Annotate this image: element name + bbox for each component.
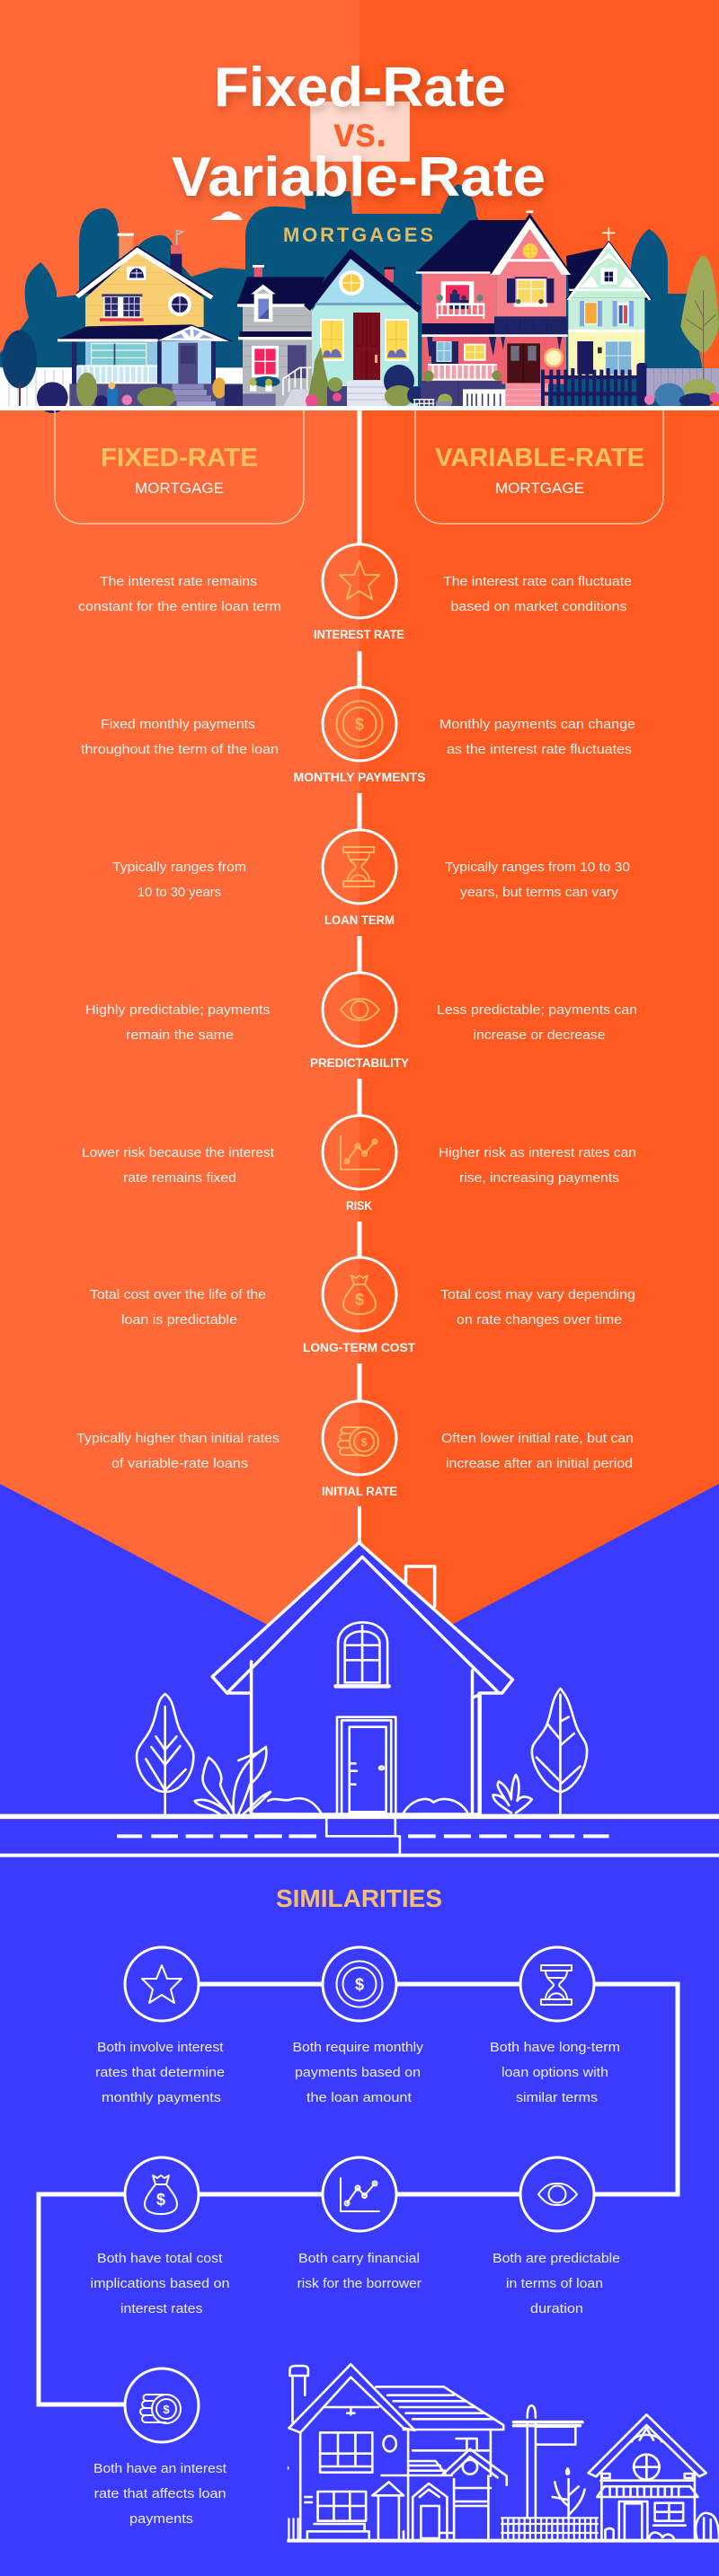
street lines bbox=[0, 1814, 719, 1819]
label: LOAN TERM bbox=[324, 913, 395, 927]
fixed-rate text: Highly predictable; payments bbox=[85, 1002, 270, 1018]
gray house bbox=[236, 265, 325, 406]
variable-rate text: Typically ranges from 10 to 30 bbox=[445, 860, 630, 875]
connector path through similarities bbox=[39, 1984, 678, 2404]
pink house bbox=[413, 210, 652, 409]
text bbox=[297, 2251, 422, 2291]
connector bbox=[358, 651, 361, 688]
front gables bbox=[381, 2439, 507, 2539]
yellow house bbox=[0, 231, 243, 413]
icon: coins: $ bbox=[360, 1435, 368, 1449]
illustration: line-art house on street bbox=[0, 1542, 719, 1856]
variable-rate text: based on market conditions bbox=[451, 599, 627, 614]
variable-rate text: The interest rate can fluctuate bbox=[443, 574, 632, 589]
vs. text: vs. bbox=[333, 109, 386, 155]
cloud bbox=[211, 212, 243, 220]
text: rates that determine bbox=[95, 2065, 225, 2080]
ground line bbox=[287, 2539, 719, 2543]
connector to house bbox=[358, 1506, 361, 1544]
fixed-rate text: constant for the entire loan term bbox=[78, 599, 281, 614]
label: INITIAL RATE bbox=[322, 1485, 397, 1498]
left bush bbox=[268, 1798, 321, 1813]
label: PREDICTABILITY bbox=[310, 1056, 409, 1070]
porch bbox=[372, 2482, 454, 2539]
row: interest rate bbox=[78, 544, 632, 641]
icon: coin: $ bbox=[355, 1976, 364, 1994]
fixed-rate text: Typically higher than initial rates bbox=[76, 1431, 280, 1446]
stray tick bbox=[288, 2466, 289, 2470]
main house bbox=[288, 2364, 503, 2539]
fixed-rate text: rate remains fixed bbox=[123, 1170, 236, 1186]
panel: fixed-rate header bbox=[55, 410, 304, 524]
variable-rate text bbox=[440, 1287, 635, 1328]
door bbox=[337, 1717, 395, 1814]
text: implications based on bbox=[90, 2276, 230, 2291]
illustration: line-art neighbourhood bbox=[287, 2364, 719, 2541]
text: Both have long-term bbox=[490, 2040, 620, 2055]
row: predictability bbox=[85, 973, 637, 1070]
text: risk for the borrower bbox=[297, 2276, 422, 2291]
chimney bbox=[289, 2366, 308, 2422]
left plant bbox=[195, 1747, 271, 1814]
fixed-rate text bbox=[78, 574, 281, 614]
text: similar terms bbox=[516, 2090, 598, 2105]
icon: money bag: $ bbox=[156, 2191, 165, 2209]
connector bbox=[358, 793, 361, 830]
heading: VARIABLE-RATE bbox=[435, 444, 644, 472]
text: Both require monthly bbox=[293, 2040, 424, 2055]
text bbox=[90, 2251, 230, 2316]
fixed-rate text bbox=[76, 1431, 280, 1471]
text: Both have an interest bbox=[93, 2461, 227, 2476]
item: interest rates bbox=[95, 1947, 225, 2105]
variable-rate text: Often lower initial rate, but can bbox=[441, 1431, 634, 1446]
label: LONG-TERM COST bbox=[303, 1341, 416, 1354]
text: the loan amount bbox=[306, 2090, 413, 2105]
fixed-rate text: remain the same bbox=[126, 1028, 234, 1043]
variable-rate text bbox=[445, 860, 630, 900]
connector bbox=[358, 1222, 361, 1258]
variable-rate text: on rate changes over time bbox=[457, 1312, 622, 1328]
title line 2: Variable-Rate bbox=[172, 146, 546, 208]
item: long-term loans bbox=[490, 1947, 620, 2105]
label: MONTHLY PAYMENTS bbox=[293, 771, 426, 784]
icon: coin bbox=[323, 687, 396, 761]
fixed-rate text: of variable-rate loans bbox=[111, 1456, 248, 1471]
variable-rate text: rise, increasing payments bbox=[459, 1170, 619, 1186]
connector bbox=[358, 1363, 361, 1400]
text: payments based on bbox=[295, 2065, 421, 2080]
text bbox=[93, 2461, 227, 2527]
right plant bbox=[493, 1775, 532, 1813]
sapling bbox=[553, 2468, 585, 2518]
variable-rate text: Higher risk as interest rates can bbox=[439, 1145, 636, 1160]
icon: money bag bbox=[125, 2157, 199, 2231]
item: predictable bbox=[493, 2157, 620, 2316]
row: long-term cost bbox=[90, 1257, 635, 1354]
row: monthly payments bbox=[81, 687, 635, 784]
icon: coins bbox=[125, 2369, 199, 2442]
fixed-rate text: The interest rate remains bbox=[100, 574, 257, 589]
icon: chart bbox=[323, 1116, 396, 1189]
title: Fixed-Rate vs. Variable-Rate bbox=[172, 57, 546, 208]
connector bbox=[358, 936, 361, 973]
fixed-rate text: Typically ranges from bbox=[112, 860, 246, 875]
text: Both have total cost bbox=[97, 2251, 223, 2266]
panel: variable-rate header bbox=[415, 410, 663, 524]
variable-rate text: Monthly payments can change bbox=[439, 717, 635, 732]
fixed-rate text: 10 to 30 years bbox=[138, 885, 221, 900]
text: duration bbox=[530, 2301, 583, 2316]
row: risk bbox=[82, 1116, 636, 1213]
row: loan term bbox=[112, 830, 630, 927]
mint house bbox=[304, 249, 425, 407]
label: RISK bbox=[346, 1199, 372, 1213]
variable-rate text: increase or decrease bbox=[473, 1028, 606, 1043]
subtitle: MORTGAGES: MORTGAGES bbox=[283, 224, 433, 246]
sign post bbox=[513, 2405, 582, 2518]
outline box bbox=[55, 410, 304, 524]
fixed-rate text bbox=[112, 860, 246, 900]
icon: coin: $ bbox=[355, 715, 364, 733]
icon: star bbox=[323, 544, 396, 618]
fixed-rate text: Lower risk because the interest bbox=[82, 1145, 275, 1160]
fixed-rate text: throughout the term of the loan bbox=[81, 742, 279, 757]
text: interest rates bbox=[120, 2301, 203, 2316]
house body fill and roof bbox=[212, 1542, 512, 1814]
right tree bbox=[532, 1689, 587, 1814]
title line 1: Fixed-Rate bbox=[214, 57, 506, 119]
icon: chart bbox=[323, 2157, 396, 2231]
fixed-rate text: loan is predictable bbox=[121, 1312, 237, 1328]
item: financial risk bbox=[297, 2157, 422, 2291]
text bbox=[493, 2251, 620, 2316]
label: INTEREST RATE bbox=[314, 628, 404, 641]
pale green house bbox=[541, 227, 719, 409]
teal tree silhouette bbox=[0, 184, 710, 406]
text: Both carry financial bbox=[298, 2251, 420, 2266]
centre spine from header to first icon bbox=[358, 410, 361, 544]
caption: MORTGAGE bbox=[135, 480, 224, 497]
row: initial rate bbox=[76, 1401, 634, 1498]
heading: similarities: SIMILARITIES bbox=[276, 1884, 442, 1912]
icon: hourglass bbox=[520, 1947, 594, 2021]
arched window bbox=[335, 1622, 389, 1686]
background: left orange half bbox=[0, 0, 360, 1707]
background: blue lower section bbox=[0, 1484, 719, 2576]
variable-rate text bbox=[439, 1145, 636, 1186]
variable-rate text: years, but terms can vary bbox=[460, 885, 619, 900]
lane dashes bbox=[117, 1834, 609, 1838]
fixed-rate text bbox=[81, 717, 279, 757]
picket fence bbox=[288, 2518, 599, 2540]
roof inner line bbox=[227, 1557, 498, 1814]
text: rate that affects loan bbox=[94, 2486, 226, 2501]
icon: money bag: $ bbox=[355, 1291, 364, 1309]
front path steps bbox=[326, 1817, 400, 1856]
icon: eye bbox=[520, 2157, 594, 2231]
right bush bbox=[404, 1799, 467, 1813]
text: payments bbox=[129, 2511, 193, 2527]
variable-rate text bbox=[441, 1431, 634, 1471]
chimney bbox=[406, 1566, 435, 1606]
icon: coins: $ bbox=[163, 2403, 170, 2416]
icon: coins bbox=[323, 1401, 396, 1475]
text bbox=[293, 2040, 424, 2105]
fixed-rate text bbox=[82, 1145, 275, 1186]
illustration: row of colourful houses bbox=[0, 184, 719, 413]
item: monthly payments bbox=[293, 1947, 424, 2105]
variable-rate text: increase after an initial period bbox=[446, 1456, 633, 1471]
heading: FIXED-RATE bbox=[101, 444, 258, 472]
right house bbox=[589, 2414, 719, 2539]
item: interest rate effect bbox=[93, 2369, 227, 2527]
text bbox=[95, 2040, 225, 2105]
variable-rate text bbox=[439, 717, 635, 757]
variable-rate text: as the interest rate fluctuates bbox=[447, 742, 632, 757]
white ground strip bbox=[0, 406, 719, 410]
text: monthly payments bbox=[102, 2090, 221, 2105]
variable-rate text bbox=[443, 574, 632, 614]
icon: money bag bbox=[323, 1257, 396, 1331]
variable-rate text: Total cost may vary depending bbox=[440, 1287, 635, 1302]
icon: coin bbox=[323, 1947, 396, 2021]
connector bbox=[358, 1079, 361, 1116]
vs. badge box bbox=[310, 101, 410, 162]
text: in terms of loan bbox=[506, 2276, 603, 2291]
text: Both are predictable bbox=[493, 2251, 620, 2266]
caption: MORTGAGE bbox=[495, 480, 584, 497]
fixed-rate text: Total cost over the life of the bbox=[90, 1287, 266, 1302]
fixed-rate text bbox=[90, 1287, 266, 1328]
text: Both involve interest bbox=[97, 2040, 224, 2055]
outline box bbox=[415, 410, 663, 524]
icon: eye bbox=[323, 973, 396, 1046]
icon: hourglass bbox=[323, 830, 396, 904]
background: right orange half bbox=[360, 0, 719, 1707]
fixed-rate text bbox=[85, 1002, 270, 1043]
icon: star bbox=[125, 1947, 199, 2021]
text: loan options with bbox=[502, 2065, 608, 2080]
variable-rate text bbox=[437, 1002, 637, 1043]
item: total cost bbox=[90, 2157, 230, 2316]
left tree bbox=[137, 1694, 193, 1814]
text bbox=[490, 2040, 620, 2105]
variable-rate text: Less predictable; payments can bbox=[437, 1002, 637, 1018]
fixed-rate text: Fixed monthly payments bbox=[101, 717, 255, 732]
